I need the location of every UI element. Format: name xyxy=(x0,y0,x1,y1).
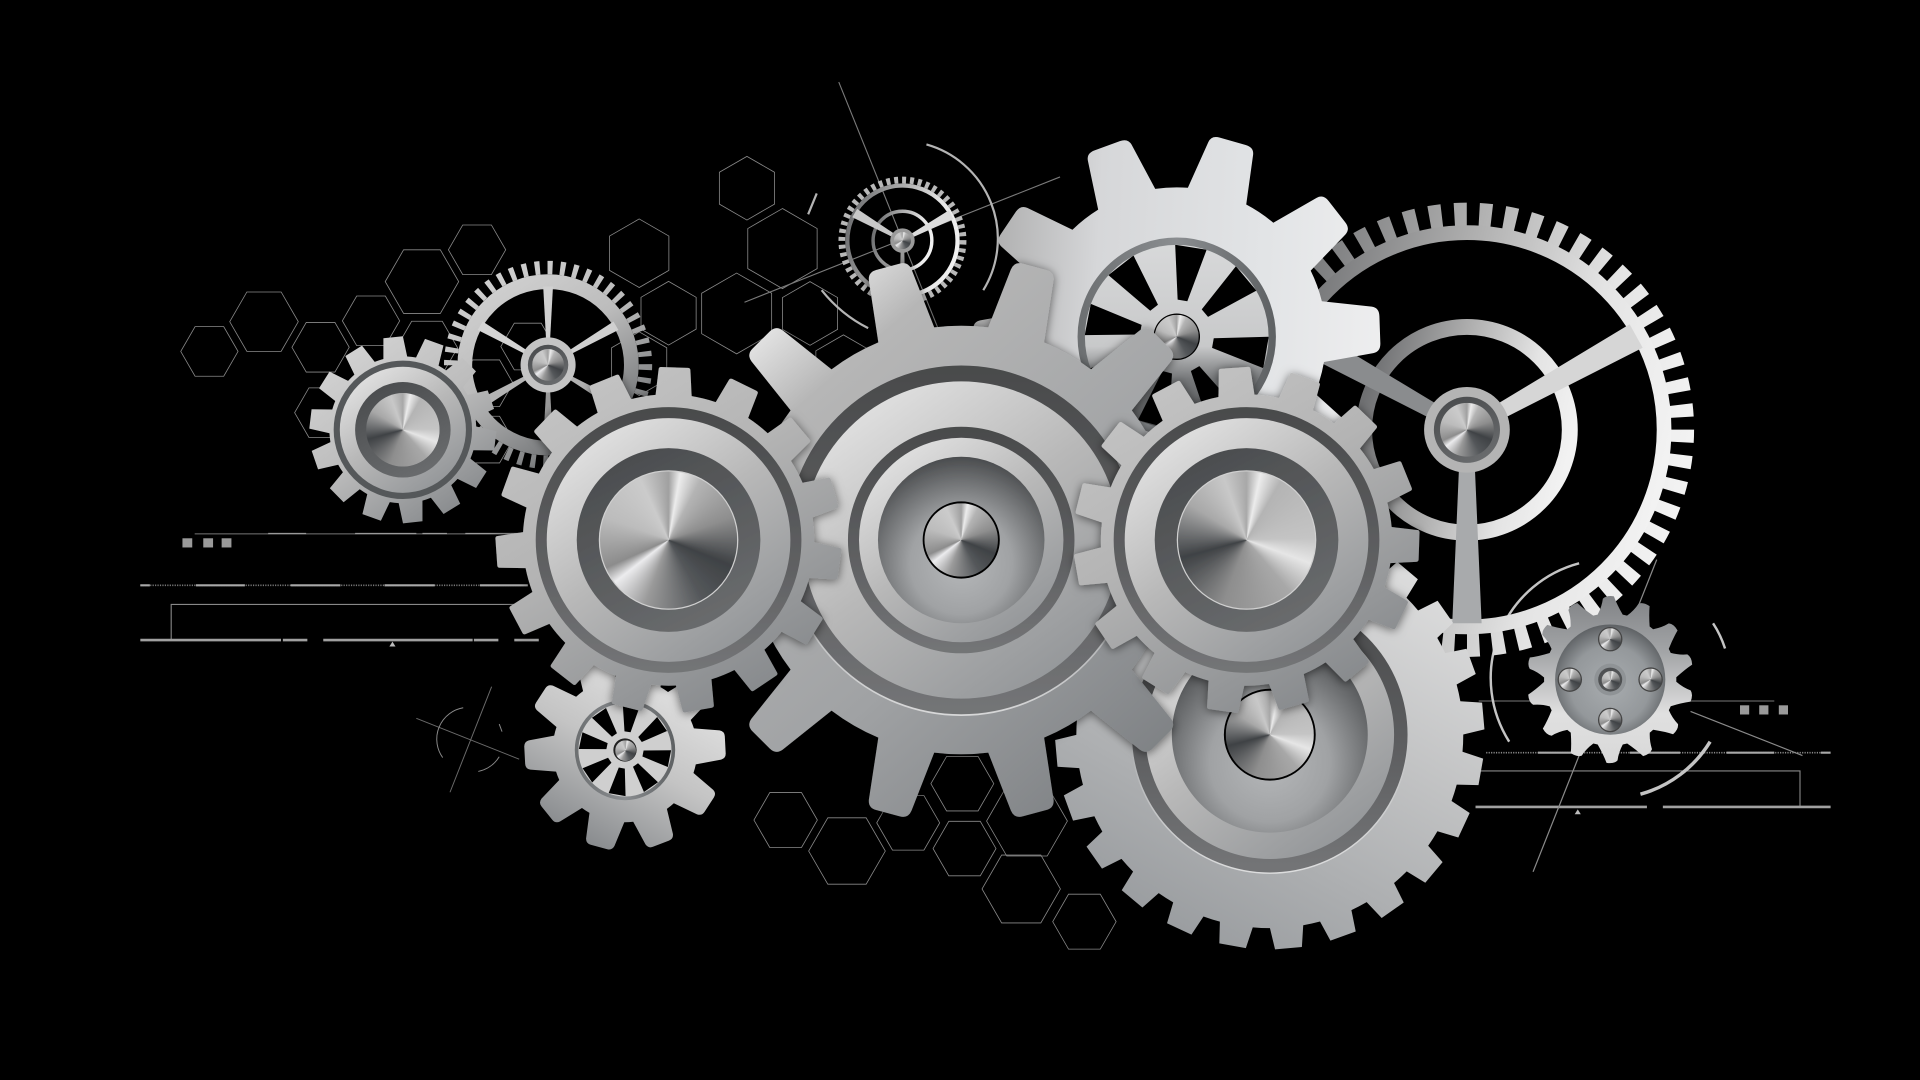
right gear cone xyxy=(1177,470,1316,610)
bolted gear body xyxy=(1524,594,1696,765)
right technical lines xyxy=(1476,560,1831,872)
central gear outer groove xyxy=(795,373,1128,707)
large toothed wheel right xyxy=(1251,214,1682,645)
right gear dark ring xyxy=(1155,448,1338,632)
top gear with spokes xyxy=(974,137,1380,434)
wheel spokes xyxy=(1291,324,1643,623)
wheel inner ring xyxy=(1364,327,1570,533)
central gear hub xyxy=(923,501,1000,579)
central gear inner groove xyxy=(853,432,1069,648)
top gear body xyxy=(974,137,1380,434)
hexagon pattern xyxy=(181,156,1116,949)
bolts xyxy=(1558,627,1663,732)
small bolted gear right xyxy=(1524,594,1696,765)
bolted gear disc xyxy=(1555,624,1665,735)
left gear groove xyxy=(541,413,796,667)
right large gear xyxy=(1069,362,1424,718)
left gear dark ring xyxy=(577,448,760,632)
left large gear xyxy=(491,362,846,718)
right gear groove xyxy=(1119,413,1374,667)
wheel teeth xyxy=(1251,214,1682,645)
bottom right gear xyxy=(1055,562,1484,950)
small wheel top xyxy=(842,180,963,301)
central gear body xyxy=(748,258,1178,818)
left technical lines xyxy=(140,534,539,647)
spoked wheel upper left xyxy=(451,268,645,462)
top gear ring xyxy=(1081,241,1272,432)
central gear groove highlight xyxy=(786,365,1136,715)
target arcs around small bolted gear xyxy=(1491,563,1725,794)
right gear body xyxy=(1069,362,1424,718)
crosshair lower left xyxy=(416,687,519,792)
left gear body xyxy=(491,362,846,718)
crosshair lines and arcs around top wheel xyxy=(744,82,1060,328)
left gear cone xyxy=(599,470,738,610)
small gear left xyxy=(305,332,501,528)
central large gear xyxy=(748,258,1178,818)
wheel rim xyxy=(1270,233,1664,627)
central gear bowl xyxy=(878,457,1044,623)
bottom left spoked gear xyxy=(524,665,726,850)
top gear hub xyxy=(1153,313,1200,360)
top gear spoke openings xyxy=(1081,241,1272,432)
wheel hub xyxy=(1424,387,1510,473)
